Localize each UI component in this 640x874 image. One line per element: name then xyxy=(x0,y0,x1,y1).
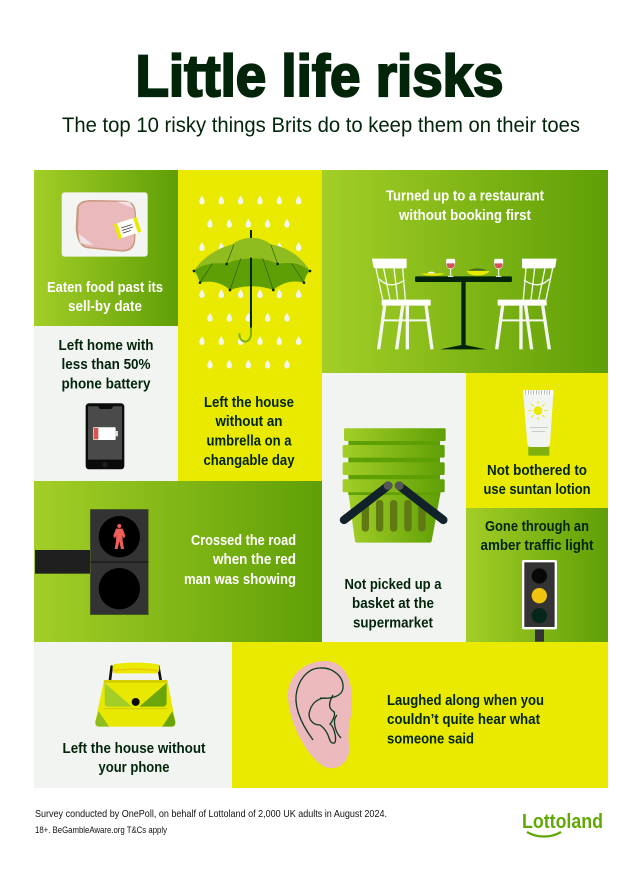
footer: survey note: 18+. BeGambleAware.org T&Cs apply xyxy=(35,825,167,836)
icon: suntan lotion tube xyxy=(523,390,553,456)
panel: red man crossing xyxy=(34,481,322,642)
panel: amber traffic light xyxy=(466,508,608,642)
label: amber light xyxy=(480,518,594,554)
label: basket: Not picked up a xyxy=(344,576,442,593)
icon: table and chairs xyxy=(372,259,557,349)
subtitle: The top 10 risky things Brits do to keep them on their toes xyxy=(62,113,580,137)
label: mishearing: couldn’t quite hear what xyxy=(387,711,540,728)
label: mishearing xyxy=(387,692,544,748)
icon: phone with low battery xyxy=(86,403,124,469)
label: phone left behind xyxy=(62,740,206,776)
label: suntan: use suntan lotion xyxy=(484,481,590,498)
label: suntan xyxy=(484,462,590,498)
label: mishearing: Laughed along when you xyxy=(387,692,544,709)
label: basket: basket at the xyxy=(352,595,434,612)
label: phone left behind: Left the house without xyxy=(62,740,206,757)
panel: umbrella xyxy=(178,170,322,481)
panel: suntan lotion xyxy=(466,373,608,508)
panel: food past sell-by date xyxy=(34,170,178,326)
footer: survey note xyxy=(35,808,387,836)
label: umbrella xyxy=(204,394,295,469)
label: red man: when the red xyxy=(212,551,296,568)
label: amber light: amber traffic light xyxy=(480,537,594,554)
label: phone battery: less than 50% xyxy=(62,356,150,373)
logo: Lottoland: Lottoland xyxy=(522,811,603,833)
title: Little life risks xyxy=(136,44,504,109)
label: restaurant xyxy=(386,188,544,224)
label: amber light: Gone through an xyxy=(485,518,589,535)
label: umbrella: changable day xyxy=(204,452,295,469)
icon: shopping basket xyxy=(343,428,446,543)
label: red man: Crossed the road xyxy=(191,532,296,549)
icon: umbrella xyxy=(193,230,311,342)
label: umbrella: umbrella on a xyxy=(206,432,292,450)
label: restaurant: Turned up to a restaurant xyxy=(386,188,544,204)
icon: pedestrian signal xyxy=(35,509,148,615)
label: restaurant: without booking first xyxy=(398,207,531,224)
icon: packaged ham xyxy=(62,192,148,257)
icon: rain drops xyxy=(199,195,301,368)
icon: ear xyxy=(288,661,352,768)
label: phone left behind: your phone xyxy=(98,759,170,776)
label: phone battery: Left home with xyxy=(58,337,154,354)
label: food: Eaten food past its xyxy=(47,279,163,296)
label: basket: supermarket xyxy=(353,614,433,632)
label: phone battery xyxy=(58,337,154,392)
label: red man: man was showing xyxy=(184,571,296,588)
label: suntan: Not bothered to xyxy=(487,462,587,479)
panel: phone battery xyxy=(34,326,178,481)
label: food xyxy=(47,279,163,315)
label: umbrella: Left the house xyxy=(204,394,294,411)
panel: mishearing xyxy=(232,642,608,788)
label: phone battery: phone battery xyxy=(62,376,151,392)
panel: left without phone xyxy=(34,642,232,788)
panel: restaurant xyxy=(322,170,608,373)
label: umbrella: without an xyxy=(215,413,282,430)
panel: basket xyxy=(322,373,466,642)
label: mishearing: someone said xyxy=(387,730,474,748)
footer: survey note: Survey conducted by OnePoll, on behalf of Lottoland of 2,000 UK adults in August 2024. xyxy=(35,808,387,820)
icon: handbag xyxy=(95,663,175,727)
icon: traffic light xyxy=(522,560,557,642)
label: red man xyxy=(184,532,296,588)
label: food: sell-by date xyxy=(68,298,142,315)
label: basket xyxy=(344,576,442,632)
